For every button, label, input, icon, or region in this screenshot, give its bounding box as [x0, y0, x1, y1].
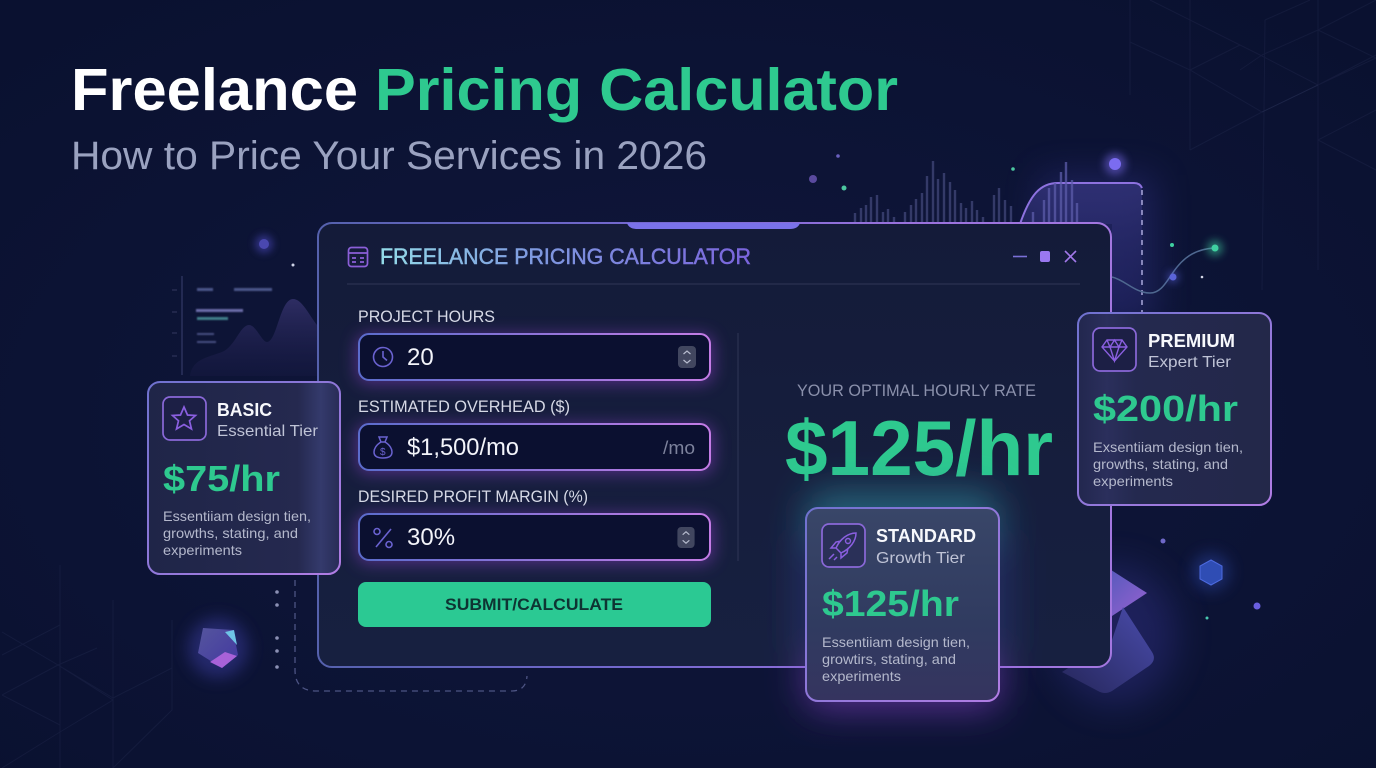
card: standard: STANDARD — [876, 526, 976, 546]
subtitle: How to Price Your Services in 2026 — [71, 134, 707, 178]
decoration: large gem — [1053, 565, 1177, 705]
background mesh: bottom left — [2, 565, 172, 768]
card: basic: BASIC — [217, 400, 272, 420]
field: profit margin: 30% — [407, 524, 455, 551]
input glow — [356, 334, 714, 564]
window controls — [1013, 251, 1076, 262]
card: premium: growths, stating, and — [1093, 456, 1228, 472]
decoration: hexagon gem — [1193, 554, 1229, 590]
card: premium: experiments — [1093, 473, 1173, 489]
card: premium: PREMIUM — [1148, 331, 1235, 351]
background mesh: top right — [1130, 0, 1376, 290]
decoration: bar spikes above the panel — [855, 161, 1011, 222]
card: basic: growths, stating, and — [163, 525, 298, 541]
icon: star — [163, 397, 206, 440]
panel: calculator window — [318, 223, 1111, 667]
icon: money bag: $ — [380, 447, 386, 458]
field: estimated overhead: $1,500/mo — [407, 434, 519, 461]
card: standard: experiments — [822, 668, 901, 684]
card: basic — [148, 382, 340, 574]
field: profit margin: DESIRED PROFIT MARGIN (%) — [358, 488, 588, 506]
decoration: dots — [255, 153, 1260, 669]
card: standard: growtirs, stating, and — [822, 651, 956, 667]
window title: FREELANCE PRICING CALCULATOR — [380, 244, 751, 269]
field: project hours: 20 — [407, 344, 434, 371]
card: standard: $125/hr — [822, 583, 959, 624]
field: estimated overhead — [358, 398, 710, 470]
stepper — [677, 527, 695, 548]
field: estimated overhead: /mo — [663, 438, 695, 458]
stepper — [678, 346, 696, 368]
card: premium — [1078, 313, 1271, 505]
button: submit — [358, 582, 711, 627]
icon: clock — [374, 348, 392, 366]
card: standard: Essentiiam design tien, — [822, 634, 970, 650]
panel top tab — [627, 223, 800, 229]
icon: money bag — [374, 437, 392, 458]
card: standard: Growth Tier — [876, 550, 966, 567]
decoration: curve with nodes — [1112, 240, 1223, 293]
icon: rocket — [822, 524, 865, 567]
decoration: dashed connector — [295, 580, 527, 691]
card: basic: $75/hr — [163, 458, 280, 499]
result label: YOUR OPTIMAL HOURLY RATE — [797, 382, 1036, 400]
title: Freelance — [71, 57, 358, 123]
card: premium: $200/hr — [1093, 388, 1238, 429]
field: project hours: PROJECT HOURS — [358, 308, 495, 326]
card: premium: Expert Tier — [1148, 354, 1232, 371]
card: standard — [806, 508, 999, 701]
decoration: small gem — [188, 618, 248, 678]
card: premium: Exsentiiam design tien, — [1093, 439, 1243, 455]
field: estimated overhead: ESTIMATED OVERHEAD ($) — [358, 398, 570, 416]
button: submit: SUBMIT/CALCULATE — [445, 595, 623, 614]
field: project hours — [358, 308, 710, 380]
icon: calculator — [348, 248, 368, 266]
card: basic: experiments — [163, 542, 242, 558]
card: basic: Essential Tier — [217, 423, 319, 440]
result value: $125/hr — [785, 404, 1053, 492]
decoration: left chart — [172, 276, 317, 376]
card: basic: Essentiiam design tien, — [163, 508, 311, 524]
icon: percent — [374, 528, 392, 548]
field: profit margin — [358, 488, 710, 560]
icon: diamond — [1093, 328, 1136, 371]
card glow: standard — [796, 490, 1010, 710]
title accent: Pricing Calculator — [375, 57, 898, 123]
decoration: back tab behind panel — [1020, 162, 1155, 325]
